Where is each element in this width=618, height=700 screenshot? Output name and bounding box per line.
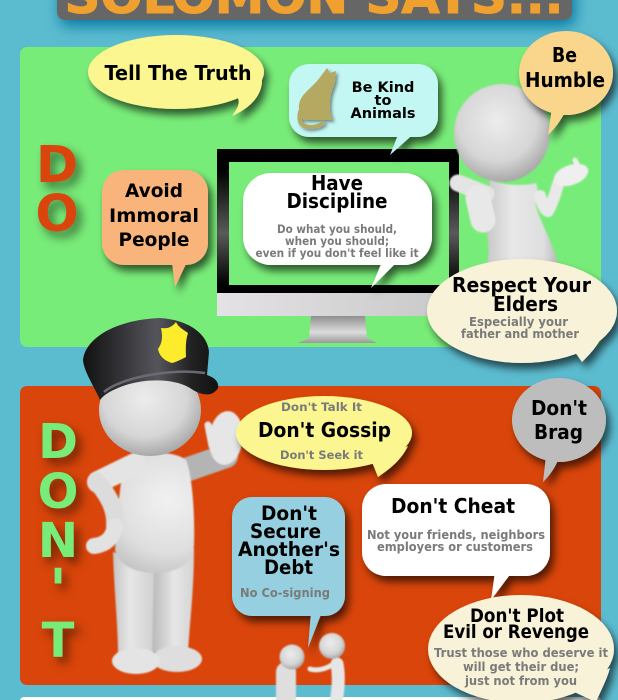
heading: DO: O bbox=[35, 185, 79, 244]
panel: don't bbox=[20, 386, 601, 685]
bubble: avoid immoral people: People bbox=[118, 229, 190, 251]
bubble: don't secure another's debt bbox=[232, 497, 345, 648]
bubble: have discipline: when you should; bbox=[285, 234, 389, 248]
bubble: don't plot evil or revenge: Evil or Revenge bbox=[443, 621, 589, 643]
panel: do bbox=[20, 47, 601, 347]
police hat bbox=[83, 318, 218, 400]
bubble: don't brag bbox=[512, 378, 606, 482]
bubble: respect your elders bbox=[427, 259, 617, 363]
text: be kind bbox=[350, 80, 416, 122]
bubble: don't plot evil or revenge: Don't Plot bbox=[470, 605, 564, 627]
bubble: don't secure another's debt: Secure bbox=[250, 520, 321, 543]
heading: DON'T: T bbox=[42, 613, 75, 669]
bubble: don't gossip: Don't Talk It bbox=[281, 400, 363, 414]
heading: DON'T: O bbox=[38, 464, 78, 520]
bubble: be humble bbox=[519, 31, 613, 135]
bubble: avoid immoral people: Immoral bbox=[109, 205, 199, 227]
bubble: don't gossip: Don't Seek it bbox=[280, 448, 363, 462]
panel: next section bbox=[20, 697, 601, 700]
heading: DON'T: N bbox=[38, 513, 78, 569]
figure: shrugging person bbox=[454, 84, 591, 264]
bubble: don't plot evil or revenge: just not from you bbox=[464, 673, 577, 688]
arm on hip bbox=[94, 464, 135, 546]
bubble: be humble: Be bbox=[552, 43, 577, 67]
bubble: have discipline: Discipline bbox=[286, 189, 388, 213]
text: be kind: Be Kind bbox=[352, 80, 414, 96]
icon: cat bbox=[299, 68, 336, 127]
bubble: avoid immoral people: Avoid bbox=[125, 180, 183, 202]
bubble: be humble: Humble bbox=[525, 68, 605, 92]
bubble: don't secure another's debt: Debt bbox=[264, 556, 313, 579]
heading: DON'T: ' bbox=[49, 556, 67, 624]
figure: two small people bbox=[280, 633, 345, 700]
figure: police officer bbox=[83, 318, 246, 674]
bubble: don't cheat bbox=[362, 484, 550, 600]
heading: DON'T: D bbox=[38, 414, 78, 470]
heading: DO: D bbox=[36, 136, 78, 195]
bubble: don't brag: Brag bbox=[534, 420, 583, 444]
heading: DON'T bbox=[38, 414, 78, 669]
bubble: respect your elders: Respect Your bbox=[452, 273, 591, 297]
bubble: don't cheat: Don't Cheat bbox=[391, 494, 515, 518]
bubble: respect your elders: Especially your bbox=[469, 315, 568, 329]
bubble: don't secure another's debt: No Co-signing bbox=[240, 586, 330, 600]
bubble: don't brag: Don't bbox=[531, 396, 587, 420]
torso bbox=[115, 453, 194, 573]
bubble: don't plot evil or revenge: Trust those who deserve it bbox=[434, 645, 608, 660]
bubble: don't secure another's debt: Another's bbox=[238, 538, 340, 561]
text: be kind: to bbox=[375, 93, 391, 109]
bubble: respect your elders: Elders bbox=[493, 292, 558, 316]
bubble: avoid immoral people bbox=[102, 170, 208, 287]
monitor bbox=[217, 149, 459, 343]
bubble: be kind to animals bbox=[289, 64, 438, 155]
legs bbox=[113, 552, 156, 654]
bubble: tell the truth bbox=[88, 35, 264, 116]
text: be kind: Animals bbox=[350, 106, 416, 122]
bubble: have discipline: Have bbox=[311, 171, 363, 195]
bubble: tell the truth: Tell The Truth bbox=[104, 61, 252, 85]
bubble: have discipline: Do what you should, bbox=[277, 222, 397, 236]
icon: badge bbox=[158, 322, 188, 363]
bubble: have discipline bbox=[243, 171, 432, 288]
bubble: don't gossip bbox=[236, 396, 412, 477]
heading: DO bbox=[35, 136, 79, 244]
bubble: have discipline: even if you don't feel like it bbox=[256, 246, 419, 260]
bubble: don't gossip: Don't Gossip bbox=[258, 418, 391, 442]
bubble: respect your elders: father and mother bbox=[461, 327, 579, 341]
bubble: don't plot evil or revenge: will get their due; bbox=[463, 659, 579, 674]
bubble: don't plot evil or revenge bbox=[428, 595, 614, 700]
shoes bbox=[152, 646, 202, 672]
raised arm bbox=[180, 456, 226, 472]
bubble: don't cheat: Not your friends, neighbors bbox=[367, 528, 545, 542]
bubble: don't secure another's debt: Don't bbox=[261, 502, 317, 525]
bubble: don't cheat: employers or customers bbox=[377, 540, 533, 554]
